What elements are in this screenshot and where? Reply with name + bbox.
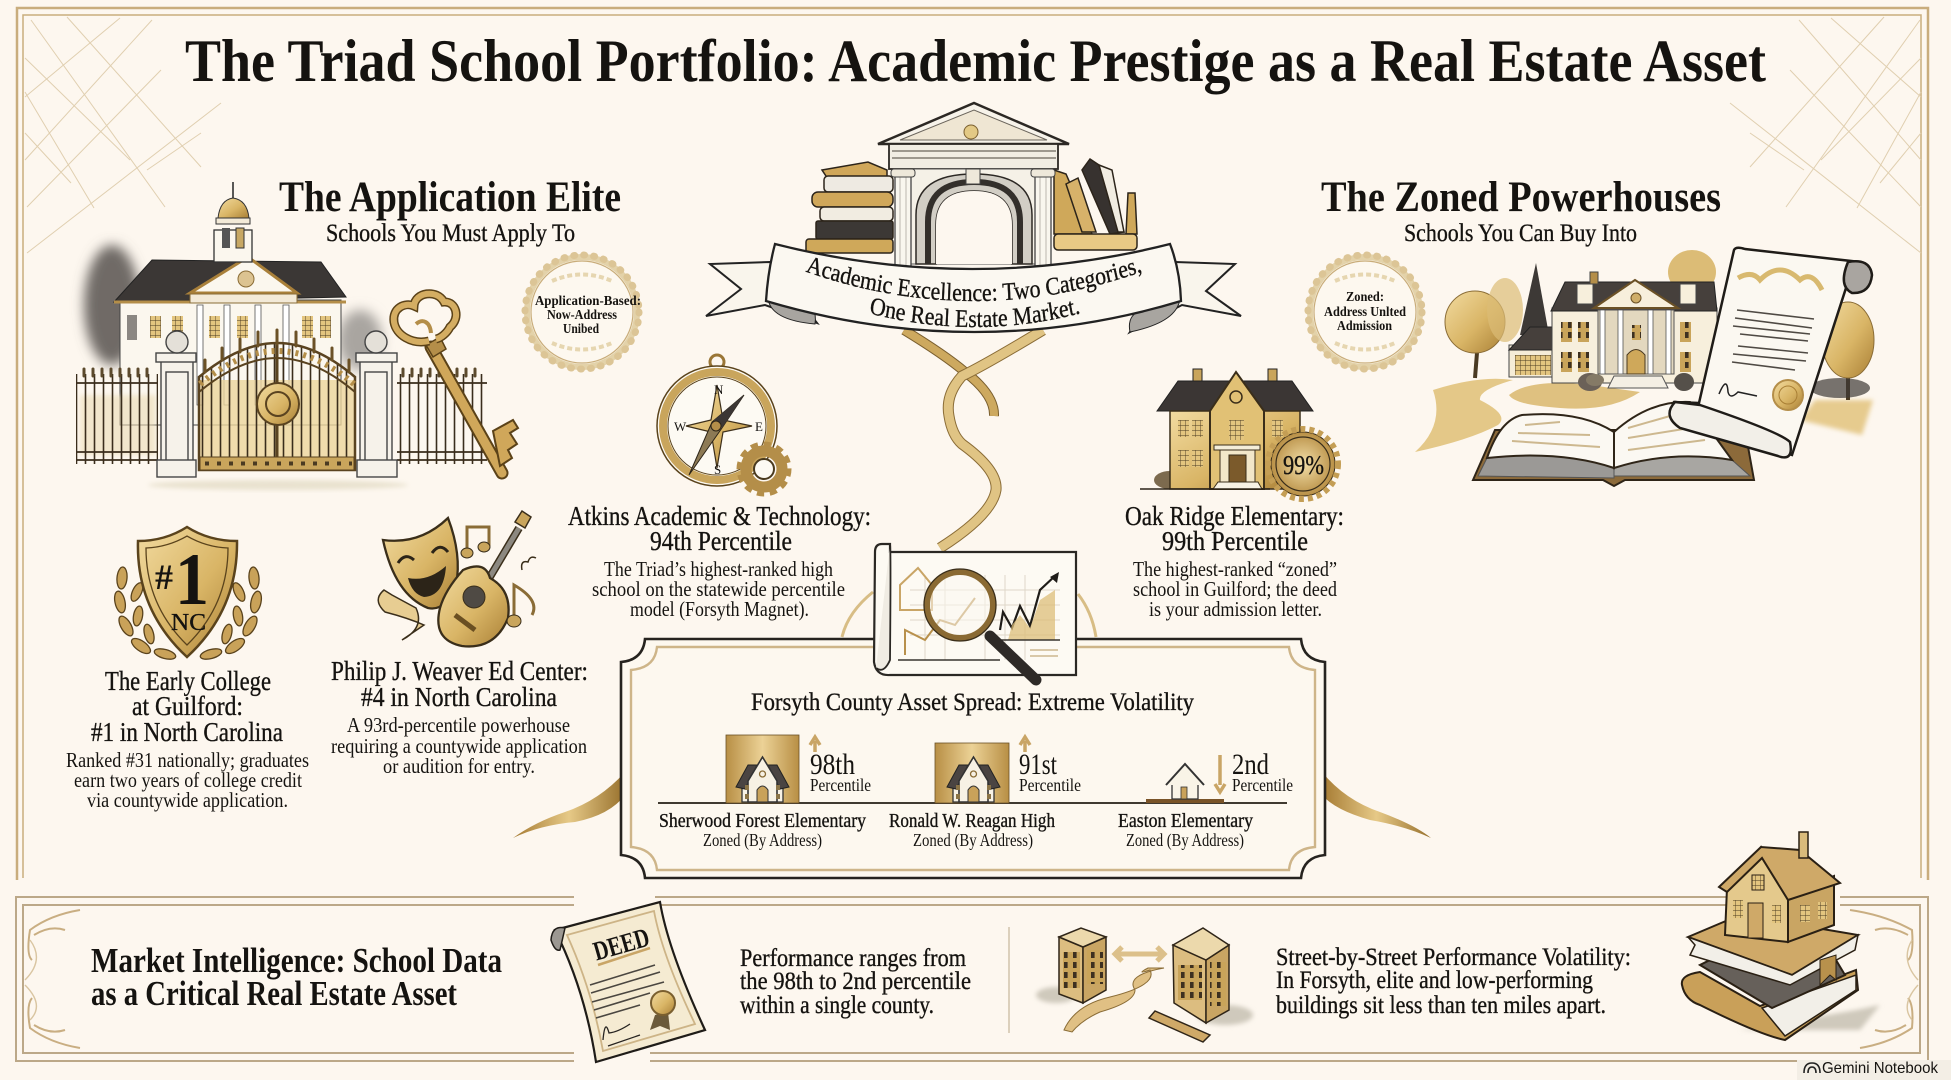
text: performance range: within a single county. [740, 992, 934, 1019]
banner: academic excellence [705, 242, 1242, 335]
seal: application based: Unibed [563, 322, 599, 337]
text: early college at guilford [66, 666, 309, 812]
book stack left [806, 162, 893, 253]
heading: zoned powerhouses [1321, 174, 1721, 247]
gate pillars [156, 331, 397, 477]
icon: compass and gear: E [755, 419, 763, 434]
open book [1473, 402, 1754, 486]
seal: application based: Now-Address [547, 308, 617, 323]
text: philip j weaver ed center [331, 656, 588, 778]
icon: compass and gear: S [714, 462, 721, 477]
text: street by street volatility [1276, 944, 1631, 1019]
icon: house on stacked books [1682, 832, 1880, 1040]
text: street by street volatility: In Forsyth, elite and low-performing [1276, 967, 1593, 994]
iron fence [76, 369, 487, 464]
school labels: Ronald W. Reagan High [889, 810, 1055, 832]
icon: compass and gear [657, 355, 788, 493]
text: early college at guilford: at Guilford: [132, 691, 243, 721]
gold ribbon connector [904, 330, 1043, 548]
text: philip j weaver ed center: #4 in North Carolina [361, 682, 557, 712]
seal: application based: Application-Based: [535, 294, 641, 309]
text: atkins academic and technology: school on the statewide percentile [592, 577, 845, 601]
icon: number one shield with laurels: NC [171, 610, 206, 636]
text: atkins academic and technology: 94th Percentile [650, 526, 792, 556]
bar: sherwood forest: 98th [810, 748, 855, 781]
heading: zoned powerhouses: The Zoned Powerhouses [1321, 174, 1721, 221]
band heading [91, 941, 502, 1013]
bar: easton: 2nd [1232, 748, 1269, 781]
icon: oak ridge house with 99 percent seal: 99% [1283, 450, 1324, 480]
bar: ronald reagan: Percentile [1019, 775, 1081, 795]
mansion [1509, 272, 1717, 391]
icon: number one shield with laurels [113, 527, 263, 661]
icon: oak ridge house with 99 percent seal [1140, 369, 1338, 499]
seal: zoned [1308, 255, 1422, 369]
icon: buildings, road and ruler [1036, 928, 1253, 1042]
bar: easton: Percentile [1232, 775, 1293, 795]
illustration: academic arch with books [806, 103, 1137, 267]
text: early college at guilford: via countywide application. [87, 788, 288, 812]
school labels: Zoned (By Address) [1126, 830, 1244, 851]
seal: zoned: Zoned: [1346, 290, 1384, 305]
text: street by street volatility: Street-by-Street Performance Volatility: [1276, 944, 1631, 971]
text: early college at guilford: #1 in North Carolina [91, 717, 283, 747]
text: oak ridge elementary: is your admission letter. [1149, 597, 1322, 621]
panel: market intelligence band [16, 832, 1928, 1062]
text: performance range: the 98th to 2nd percentile [740, 968, 971, 995]
golden key [394, 294, 518, 473]
text: atkins academic and technology: model (Forsyth Magnet). [630, 597, 809, 621]
school labels [659, 810, 1253, 851]
text: philip j weaver ed center: requiring a countywide application [331, 734, 587, 758]
badge: gemini notebook: Gemini Notebook [1822, 1060, 1939, 1077]
school labels: Zoned (By Address) [703, 830, 822, 851]
illustration: mansion, deed scroll and open book [1415, 248, 1874, 486]
trees [1445, 250, 1874, 400]
panel: forsyth county asset spread [621, 639, 1325, 878]
heading: application elite: Schools You Must Apply To [326, 220, 575, 247]
bar: sherwood forest: Percentile [810, 775, 871, 795]
icon: number one shield with laurels: # [155, 557, 173, 597]
icon: number one shield with laurels: 1 [175, 539, 209, 621]
icon: compass and gear: N [714, 382, 724, 397]
icon: chart scroll and magnifier [874, 544, 1076, 680]
ribbon tails behind panel [513, 592, 1431, 838]
school labels: Sherwood Forest Elementary [659, 810, 866, 832]
text: oak ridge elementary: 99th Percentile [1162, 526, 1308, 556]
deed scroll [1670, 248, 1872, 457]
band heading: Market Intelligence: School Data [91, 941, 502, 980]
heading: application elite: The Application Elite [279, 174, 621, 221]
text: philip j weaver ed center: A 93rd-percentile powerhouse [347, 713, 570, 737]
icon: deed [551, 902, 705, 1062]
banner text line two: One Real Estate Market. [870, 298, 1080, 328]
text: performance range [740, 945, 971, 1019]
seal: zoned: Admission [1337, 319, 1392, 334]
school building [114, 182, 346, 425]
banner text: Academic Excellence: Two Categories, [805, 258, 1142, 302]
text: early college at guilford: The Early College [105, 666, 271, 696]
seal: application based [525, 255, 641, 369]
bar: sherwood forest [726, 735, 871, 803]
heading: application elite [279, 174, 621, 247]
icon: compass and gear: W [674, 419, 687, 434]
text: philip j weaver ed center: Philip J. Weaver Ed Center: [331, 656, 588, 686]
book stack right [1054, 159, 1137, 250]
page frame [17, 8, 1928, 880]
icon: deed: DEED [590, 922, 653, 966]
panel heading: Forsyth County Asset Spread: Extreme Volatility [751, 689, 1194, 716]
illustration: gated school and key [76, 182, 518, 490]
text: atkins academic and technology: The Triad’s highest-ranked high [604, 557, 833, 581]
band heading: as a Critical Real Estate Asset [91, 974, 457, 1013]
title: The Triad School Portfolio: Academic Prestige as a Real Estate Asset [185, 28, 1766, 94]
text: atkins academic and technology [568, 501, 871, 621]
bar: easton [1146, 748, 1293, 803]
bar: ronald reagan: 91st [1019, 748, 1058, 781]
iron gate [199, 330, 355, 470]
school labels: Easton Elementary [1118, 810, 1253, 832]
heading: zoned powerhouses: Schools You Can Buy Into [1404, 220, 1637, 247]
bar: ronald reagan [935, 737, 1081, 803]
badge: gemini notebook [1797, 1060, 1951, 1080]
text: oak ridge elementary: school in Guilford; the deed [1133, 577, 1337, 601]
text: oak ridge elementary: Oak Ridge Elementary: [1125, 501, 1344, 531]
text: atkins academic and technology: Atkins Academic & Technology: [568, 501, 871, 531]
text: performance range: Performance ranges from [740, 945, 966, 972]
school labels: Zoned (By Address) [913, 830, 1033, 851]
text: street by street volatility: buildings sit less than ten miles apart. [1276, 992, 1606, 1019]
seal: zoned: Address Unlted [1324, 305, 1406, 320]
text: oak ridge elementary [1125, 501, 1344, 621]
arch [878, 103, 1069, 267]
text: early college at guilford: earn two years of college credit [74, 768, 302, 792]
text: philip j weaver ed center: or audition for entry. [383, 754, 535, 778]
text: early college at guilford: Ranked #31 nationally; graduates [66, 748, 309, 772]
baseline [658, 802, 1287, 804]
text: oak ridge elementary: The highest-ranked “zoned” [1133, 557, 1337, 581]
icon: theatre mask and guitar [378, 511, 536, 646]
corner lattice decoration [25, 17, 1921, 253]
